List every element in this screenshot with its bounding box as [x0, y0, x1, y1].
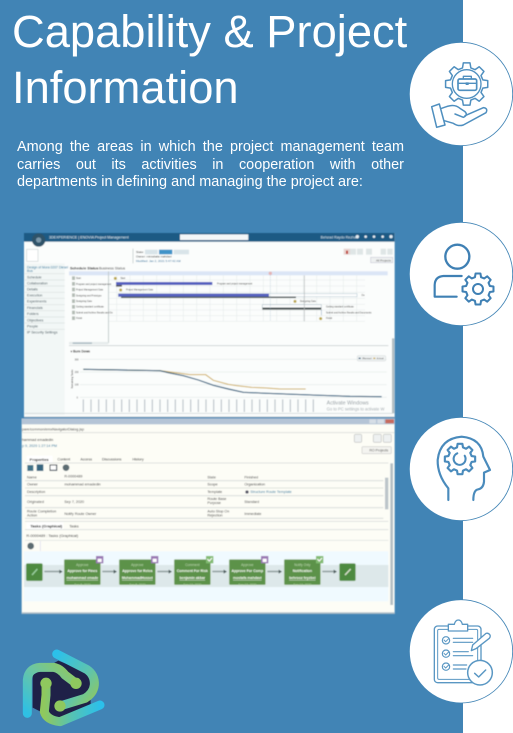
- screenshot: route task properties and graphical tasks: Rejection: [207, 514, 223, 518]
- screenshot: project schedule and burn down chart: Start: [76, 277, 81, 280]
- screenshot: project schedule and burn down chart: Remaining Tasks: [71, 369, 74, 389]
- screenshot: route task properties and graphical tasks: Notify Only: [294, 563, 311, 567]
- screenshot: route task properties and graphical tasks: mostafa mahdavi: [233, 576, 262, 580]
- screenshot: route task properties and graphical tasks: [20, 417, 396, 614]
- screenshot: route task properties and graphical tasks: Name: [27, 475, 37, 479]
- screenshot: project schedule and burn down chart: Objectives: [27, 318, 44, 322]
- screenshot: project schedule and burn down chart: Getting standard certificate: [326, 306, 355, 309]
- title: Capability & Project: [12, 6, 407, 57]
- screenshot: route task properties and graphical tasks: Comment For Risk: [177, 569, 208, 573]
- screenshot: project schedule and burn down chart: Start: [120, 277, 126, 280]
- screenshot: project schedule and burn down chart: Business Status: [99, 267, 125, 271]
- screenshot: route task properties and graphical tasks: Sep 10, 2020: [238, 583, 257, 587]
- screenshot: route task properties and graphical tasks: Approve For Comp: [231, 569, 263, 573]
- screenshot: project schedule and burn down chart: Submit and Archive Results and Documents: [326, 311, 372, 314]
- screenshot: route task properties and graphical tasks: Properties: [30, 458, 49, 462]
- screenshot: route task properties and graphical tasks: Finished: [244, 475, 258, 479]
- screenshot: route task properties and graphical tasks: State: [207, 475, 216, 479]
- screenshot: route task properties and graphical tasks: Sep 10, 2020: [183, 583, 202, 587]
- logo: [22, 650, 104, 726]
- screenshot: route task properties and graphical tasks: R-0000489 : Tasks (Graphical): [26, 534, 79, 538]
- screenshot: project schedule and burn down chart: IP Security Settings: [27, 331, 58, 335]
- screenshot: project schedule and burn down chart: Collaboration: [27, 281, 48, 285]
- screenshot: project schedule and burn down chart: Financials: [27, 306, 43, 310]
- screenshot: route task properties and graphical tasks: MohammadHossei: [122, 576, 153, 580]
- screenshot: project schedule and burn down chart: Modified: Jan 2, 2021 5:47:42 AM: [136, 259, 181, 263]
- intro text block: Among the areas in which the project management team carries out its activities in cooperation with other departments in defining and managing the project are:: [17, 139, 404, 190]
- screenshot: route task properties and graphical tasks: Content: [57, 458, 70, 462]
- screenshot: route task properties and graphical tasks: Approve for Relea: [122, 569, 152, 573]
- screenshot: project schedule and burn down chart: Activate Windows: [327, 400, 369, 406]
- screenshot: project schedule and burn down chart: Schedule Status: [70, 267, 98, 271]
- screenshot: project schedule and burn down chart: Design of Mora 0207 Diesel: [27, 266, 68, 270]
- screenshot: route task properties and graphical tasks: Immediate: [244, 512, 261, 516]
- screenshot: route task properties and graphical tasks: History: [132, 458, 144, 462]
- screenshot: route task properties and graphical tasks: Scope: [207, 483, 218, 487]
- screenshot: route task properties and graphical tasks: Template: [207, 490, 222, 494]
- screenshot: route task properties and graphical tasks: RO Projects: [369, 449, 388, 453]
- screenshot: route task properties and graphical tasks: mohammad emade: [66, 576, 98, 580]
- screenshot: project schedule and burn down chart: Finish: [76, 318, 83, 320]
- screenshot: project schedule and burn down chart: Submit and Archive Results and Do: [76, 311, 113, 314]
- screenshot: route task properties and graphical tasks: Discussions: [102, 458, 122, 462]
- screenshot: project schedule and burn down chart: All Projects: [376, 258, 392, 262]
- screenshot: project schedule and burn down chart: [23, 232, 396, 418]
- screenshot: project schedule and burn down chart: Actual: [377, 357, 384, 360]
- title: Information: [12, 62, 239, 113]
- screenshot: project schedule and burn down chart: Project Management Gate: [76, 289, 104, 292]
- screenshot: project schedule and burn down chart: ▾ Burn Down: [70, 349, 90, 353]
- icon: checklist clipboard with pencil and badge: [410, 599, 513, 704]
- screenshot: route task properties and graphical tasks: Organization: [244, 483, 265, 487]
- screenshot: project schedule and burn down chart: Finish: [326, 318, 333, 320]
- screenshot: project schedule and burn down chart: Designing Gate: [300, 300, 317, 303]
- screenshot: route task properties and graphical tasks: behrooz feyzbxi: [289, 576, 316, 580]
- screenshot: route task properties and graphical tasks: Notification: [293, 569, 312, 573]
- screenshot: project schedule and burn down chart: Bus: [27, 269, 33, 273]
- screenshot: project schedule and burn down chart: Getting standard certificate: [76, 306, 105, 309]
- screenshot: project schedule and burn down chart: Program and project management: [217, 282, 253, 285]
- screenshot: project schedule and burn down chart: Designing Gate: [76, 300, 93, 303]
- screenshot: route task properties and graphical tasks: Description: [27, 490, 45, 494]
- screenshot: project schedule and burn down chart: Schedule: [27, 275, 42, 279]
- screenshot: route task properties and graphical tasks: Structure Route Template: [250, 490, 292, 494]
- icon: person with gear: [410, 222, 513, 326]
- screenshot: route task properties and graphical tasks: pare/common/emxNavigatorDialog.jsp: [22, 427, 84, 431]
- screenshot: project schedule and burn down chart: State:: [136, 250, 144, 254]
- screenshot: project schedule and burn down chart: Go to PC settings to activate W: [327, 407, 384, 412]
- screenshot: project schedule and burn down chart: 100: [75, 385, 79, 387]
- screenshot: project schedule and burn down chart: 300: [75, 359, 79, 361]
- icon: capability gear, briefcase and hand: [410, 42, 513, 146]
- screenshot: route task properties and graphical tasks: Route Base: [207, 497, 226, 501]
- screenshot: project schedule and burn down chart: Execution: [27, 294, 42, 298]
- screenshot: route task properties and graphical tasks: Sep 7, 2020: [64, 500, 84, 504]
- screenshot: route task properties and graphical tasks: Route Completion: [27, 509, 56, 513]
- screenshot: project schedule and burn down chart: Designing and Prototype: [76, 294, 102, 297]
- screenshot: project schedule and burn down chart: Program and project management: [76, 283, 112, 286]
- screenshot: route task properties and graphical tasks: Tasks (Graphical): [30, 525, 63, 529]
- screenshot: project schedule and burn down chart: Project Management Gate: [126, 288, 154, 291]
- screenshot: route task properties and graphical tasks: Action: [27, 514, 37, 518]
- screenshot: project schedule and burn down chart: Folders: [27, 312, 39, 316]
- screenshot: project schedule and burn down chart: Planned: [362, 357, 372, 360]
- icon: head with gear: [410, 417, 513, 521]
- screenshot: route task properties and graphical tasks: Standard: [244, 500, 259, 504]
- screenshot: route task properties and graphical tasks: Tasks: [69, 524, 79, 528]
- screenshot: route task properties and graphical tasks: mohammad emadedin: [64, 483, 101, 487]
- screenshot: project schedule and burn down chart: 3DEXPERIENCE | ENOVIA Project Management: [49, 235, 129, 239]
- screenshot: route task properties and graphical tasks: Sep 8, 2020: [129, 583, 146, 587]
- screenshot: route task properties and graphical tasks: Purpose: [207, 501, 221, 505]
- screenshot: route task properties and graphical tasks: Approve: [241, 563, 254, 567]
- screenshot: project schedule and burn down chart: Experiments: [27, 300, 47, 304]
- screenshot: project schedule and burn down chart: People: [27, 324, 38, 328]
- screenshot: project schedule and burn down chart: Behzad Raydo Rezhad: [321, 235, 358, 239]
- screenshot: project schedule and burn down chart: De: [362, 295, 365, 297]
- screenshot: route task properties and graphical tasks: Access: [80, 458, 92, 462]
- screenshot: route task properties and graphical tasks: p 9, 2020 1:27:14 PM: [22, 444, 57, 448]
- screenshot: project schedule and burn down chart: 0: [77, 397, 79, 399]
- screenshot: route task properties and graphical tasks: Approve for Fines: [67, 569, 97, 573]
- screenshot: project schedule and burn down chart: Owner: mirzabala mahdavi: [136, 254, 172, 258]
- screenshot: project schedule and burn down chart: 200: [75, 372, 79, 374]
- screenshot: route task properties and graphical tasks: benjamin akbar: [179, 576, 206, 580]
- screenshot: route task properties and graphical tasks: Notify Route Owner: [64, 512, 97, 516]
- title: [12, 6, 407, 113]
- screenshot: project schedule and burn down chart: Details: [27, 287, 38, 291]
- screenshot: route task properties and graphical tasks: R-0000489: [64, 475, 82, 479]
- screenshot: route task properties and graphical tasks: Comment: [185, 563, 200, 567]
- screenshot: route task properties and graphical tasks: Approve: [76, 563, 89, 567]
- screenshot: route task properties and graphical tasks: Sep 8, 2020: [74, 583, 91, 587]
- screenshot: route task properties and graphical tasks: Originated: [27, 500, 44, 504]
- screenshot: route task properties and graphical tasks: Auto Stop On: [207, 509, 229, 513]
- screenshot: route task properties and graphical tasks: Owner: [27, 483, 39, 487]
- screenshot: route task properties and graphical tasks: Sep 10, 2020: [293, 583, 312, 587]
- screenshot: route task properties and graphical tasks: Approve: [131, 563, 144, 567]
- screenshot: route task properties and graphical tasks: hammad emadedin: [22, 438, 53, 442]
